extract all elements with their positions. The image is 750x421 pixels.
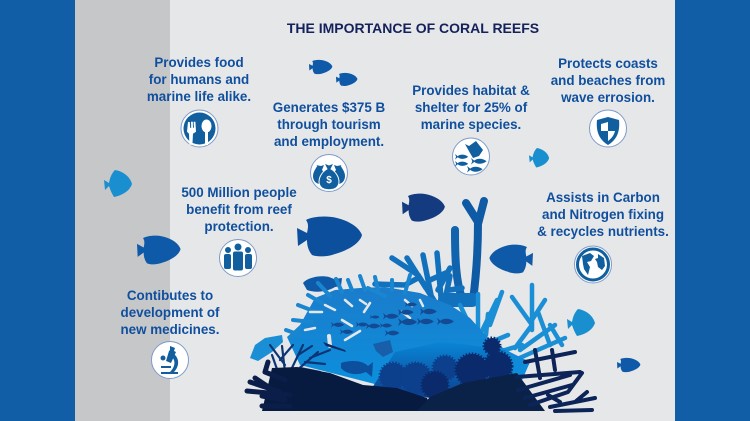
- dark bushes: [380, 356, 457, 393]
- text: people: benefit from reef: [186, 202, 292, 217]
- text: revenue: Generates $375 B: [273, 100, 386, 115]
- lower water: [372, 342, 515, 398]
- icon: microscope: [152, 342, 188, 378]
- fish: lower right blue: [567, 309, 595, 336]
- fish: oval: [303, 276, 342, 292]
- fish: large: [297, 217, 362, 256]
- text: revenue: and employment.: [274, 134, 384, 149]
- text: food: marine life alike.: [147, 89, 251, 104]
- icon: shield: [590, 110, 626, 147]
- right light corals: [460, 285, 565, 360]
- text: coasts: Protects coasts: [558, 56, 658, 71]
- text: people: protection.: [204, 219, 274, 234]
- text: habitat: Provides habitat &: [412, 83, 530, 98]
- text: revenue: through tourism: [277, 117, 381, 132]
- coral reef scene: [247, 201, 595, 411]
- icon: money bags: [310, 154, 348, 192]
- mound branch edges: [286, 275, 410, 338]
- light reef mound: [287, 287, 530, 398]
- foreground coral left: [247, 362, 290, 406]
- text: food: Provides food: [154, 55, 244, 70]
- icon: fish school: [452, 138, 490, 175]
- fish: far right: [617, 358, 640, 372]
- left dark sea fan: [270, 345, 330, 372]
- text: coasts: and beaches from: [551, 73, 665, 88]
- foreground coral right: [517, 350, 595, 411]
- fish: left blue: [104, 170, 132, 197]
- fish: small blue centre: [529, 148, 549, 167]
- fish: top dark: [402, 194, 445, 222]
- rocks: [262, 367, 432, 411]
- icon: money bags: $: [326, 175, 332, 186]
- text: medicines: development of: [121, 305, 220, 320]
- white gaps: [305, 300, 423, 346]
- fish: upper pair: [309, 60, 357, 86]
- text: food: for humans and: [149, 72, 249, 87]
- text: coasts: wave errosion.: [560, 90, 655, 105]
- title: THE IMPORTANCE OF CORAL REEFS: [287, 20, 539, 36]
- text: medicines: Contibutes to: [127, 288, 213, 303]
- icon: people: [220, 240, 256, 276]
- fan coral: [375, 253, 462, 310]
- tall back coral: [445, 201, 484, 300]
- text: people: 500 Million people: [181, 185, 297, 200]
- text: habitat: shelter for 25% of: [415, 100, 528, 115]
- fish: left navy: [137, 236, 181, 264]
- icon: globe: [574, 246, 612, 283]
- text: carbon: Assists in Carbon: [546, 190, 660, 205]
- fish: right: [489, 245, 533, 273]
- icon: fork and spoon: [181, 110, 218, 147]
- left light fish: [250, 335, 283, 361]
- text: carbon: & recycles nutrients.: [537, 224, 669, 239]
- school of small fish: [323, 302, 454, 377]
- text: medicines: new medicines.: [121, 322, 219, 337]
- text: carbon: and Nitrogen fixing: [542, 207, 664, 222]
- text: habitat: marine species.: [421, 117, 521, 132]
